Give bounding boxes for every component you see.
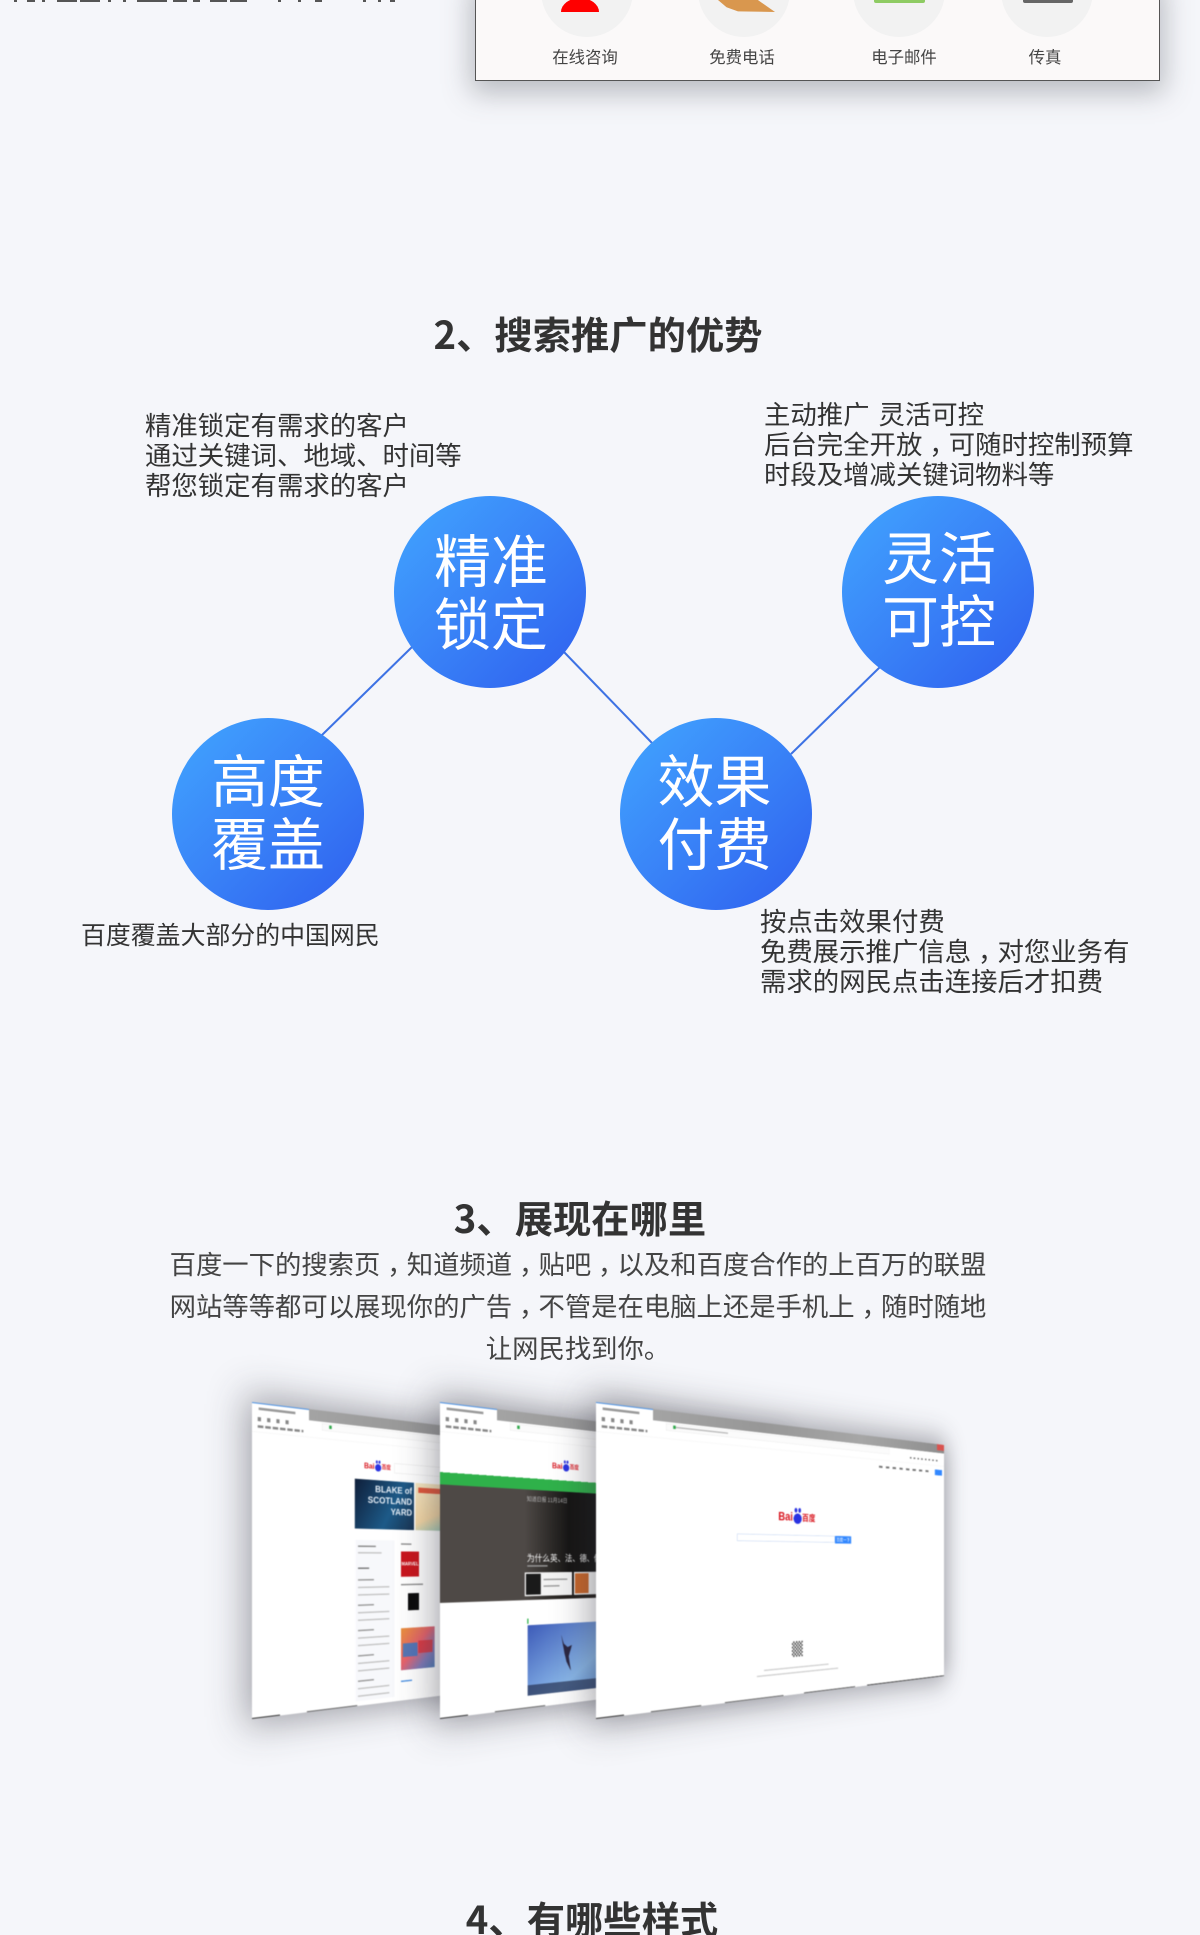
caption: flexible control: 主动推广 灵活可控 [764,392,984,432]
baidu logo [552,1460,580,1472]
banner: movie poster [355,1479,414,1530]
circle: pay per effect [620,718,812,910]
caption: wide coverage: 百度覆盖大部分的中国网民 [81,916,380,952]
connector lines [322,646,880,755]
caption: flexible control: 后台完全开放 ，可随时控制预算 [764,422,1133,462]
baidu logo: Bai [364,1461,374,1471]
browser window: baidu search home [596,1402,944,1719]
baidu logo: Bai [552,1461,562,1471]
search button: 百度一下 [836,1536,850,1543]
banner: movie poster: YARD [391,1507,412,1518]
circle: wide coverage [172,718,364,910]
browser screenshots group [222,1374,960,1747]
heading: section 3: 3、展现在哪里 [454,1190,706,1245]
circle: wide coverage: 覆盖 [211,800,325,882]
hero headline: 为什么英、法、德、俄、美 [527,1551,615,1564]
baidu logo: Bai [778,1510,793,1523]
circle: pay per effect: 效果 [658,736,772,818]
tile: marvel: MARVEL [402,1561,419,1567]
paragraph: where ads display: 让网民找到你。 [486,1327,670,1366]
QR code [792,1641,803,1657]
search box [737,1534,835,1543]
caption: precise targeting [145,404,462,503]
circle: pay per effect: 付费 [658,800,772,882]
dark hero panel [440,1484,788,1603]
icon: email [853,0,945,37]
circle: flexible control [842,496,1034,688]
green nav bar [440,1472,788,1505]
icon: free phone [698,0,790,37]
browser window: baidu zhidao: 知道日报 11月14日 [527,1495,567,1505]
caption: flexible control: 时段及增减关键词物料等 [764,452,1054,492]
circle: precise targeting: 锁定 [434,580,548,662]
paragraph: where ads display: 网站等等都可以展现你的广告 ，不管是在电脑上还是手机上 ，随时随地 [170,1285,986,1324]
panel: contact methods screenshot [475,0,1160,81]
heading: section 2: 2、搜索推广的优势 [434,306,762,360]
caption: precise targeting: 精准锁定有需求的客户 [145,404,409,443]
caption: flexible control [764,392,1133,492]
circle: flexible control: 灵活 [882,514,996,596]
banner: movie poster: BLAKE of [375,1484,412,1497]
icon: online consult [541,0,633,37]
tile: marvel [401,1551,419,1577]
clipped text fragment at top-left [14,0,395,2]
tile: gradient card [401,1626,435,1670]
circle: precise targeting [394,496,586,688]
caption: precise targeting: 通过关键词、地域、时间等 [145,434,462,473]
baidu logo [778,1507,816,1525]
paragraph: where ads display [170,1243,986,1366]
circle: precise targeting: 精准 [434,516,548,598]
top nav [879,1466,931,1472]
caption: pay per effect: 需求的网民点击连接后才扣费 [760,960,1103,999]
thumbnail card [525,1572,572,1596]
blue photo [528,1619,640,1696]
caption: pay per effect: 按点击效果付费 [760,900,945,939]
banner: movie poster: SCOTLAND [368,1494,412,1507]
caption: pay per effect [760,900,1129,999]
baidu logo [364,1460,392,1472]
icon: fax [1001,0,1093,37]
baidu logo: 百度 [570,1464,579,1471]
circle: wide coverage: 高度 [211,736,325,818]
label: fax: 传真 [1029,44,1061,68]
thumbnail card [574,1572,617,1595]
baidu logo: 百度 [802,1514,815,1524]
browser window: baidu zhidao [440,1402,788,1719]
caption: pay per effect: 免费展示推广信息 ，对您业务有 [760,930,1129,969]
label: email: 电子邮件 [871,44,937,68]
baidu logo: 百度 [382,1464,391,1471]
browser window: baidu homepage feed [252,1402,600,1719]
paragraph: where ads display: 百度一下的搜索页 ，知道频道 ，贴吧 ，以及和百度合作的上百万的联盟 [170,1243,986,1282]
circle: flexible control: 可控 [882,577,996,659]
label: free phone: 免费电话 [709,44,775,68]
label: online consult: 在线咨询 [552,44,618,68]
caption: precise targeting: 帮您锁定有需求的客户 [145,464,409,503]
